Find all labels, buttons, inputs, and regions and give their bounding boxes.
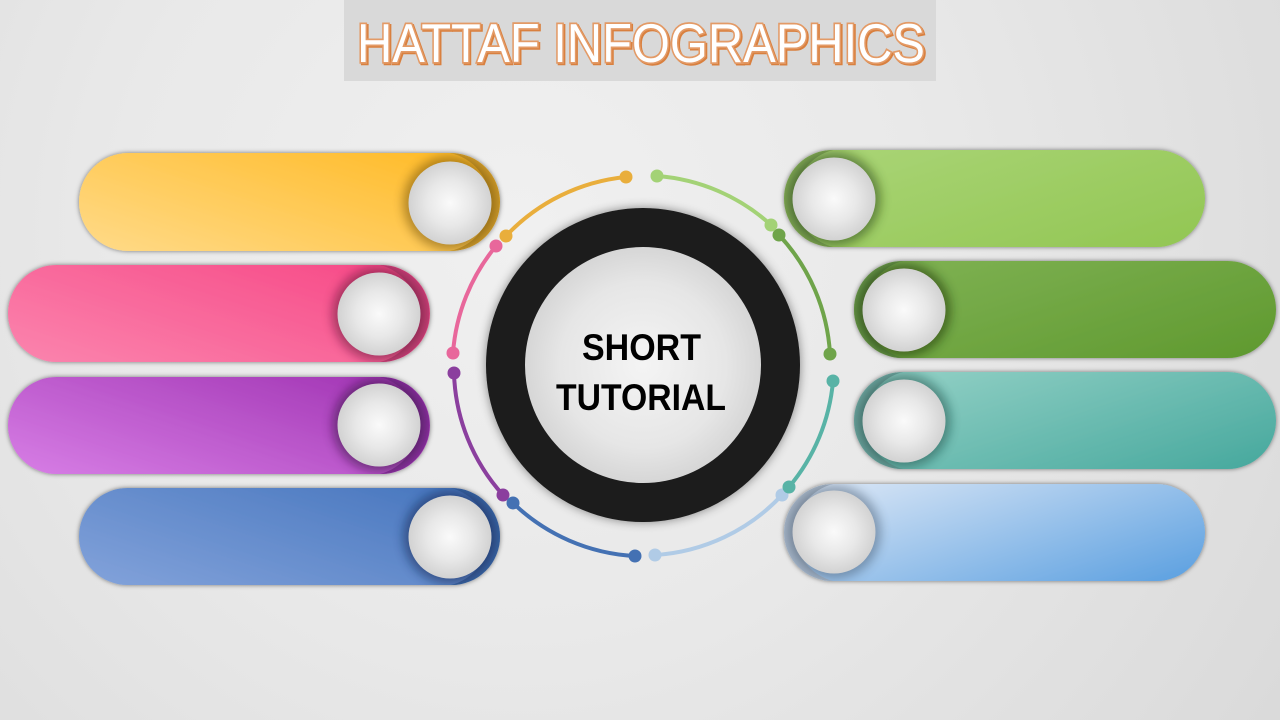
icon: purple pill ball — [338, 384, 420, 466]
arc: pink — [446, 240, 502, 360]
panel: light blue pill — [784, 484, 1205, 581]
arc: blue — [506, 496, 642, 562]
arc: dark green — [772, 228, 836, 360]
panel: pink pill — [8, 265, 430, 362]
inner disc — [525, 247, 761, 483]
icon: teal pill ball — [862, 380, 946, 462]
icon: blue pill ball — [408, 496, 492, 578]
arc: teal — [782, 374, 840, 494]
panel: blue pill — [79, 488, 500, 585]
icon: light blue pill ball — [792, 490, 876, 574]
icon: yellow pill ball — [408, 162, 492, 244]
center label: SHORT — [582, 327, 701, 368]
panel: purple pill — [8, 377, 430, 474]
center label — [556, 327, 726, 418]
center hub — [486, 208, 800, 522]
panel: green pill — [853, 261, 1276, 358]
title banner: HATTAF INFOGRAPHICS — [357, 12, 925, 74]
arc: purple — [448, 366, 510, 502]
icon: pink pill ball — [338, 272, 420, 356]
center label: TUTORIAL — [556, 377, 726, 418]
icon: light green pill ball — [792, 158, 876, 240]
icon: green pill ball — [862, 268, 946, 352]
panel: yellow pill — [79, 153, 500, 251]
black ring — [486, 208, 800, 522]
panel: teal pill — [853, 372, 1276, 469]
title banner — [344, 0, 936, 81]
title banner: HATTAF INFOGRAPHICS — [358, 14, 926, 76]
arc: light green — [650, 170, 778, 232]
arc: light blue — [648, 488, 788, 562]
panel: light green pill — [783, 150, 1205, 247]
arc: yellow — [500, 170, 632, 242]
